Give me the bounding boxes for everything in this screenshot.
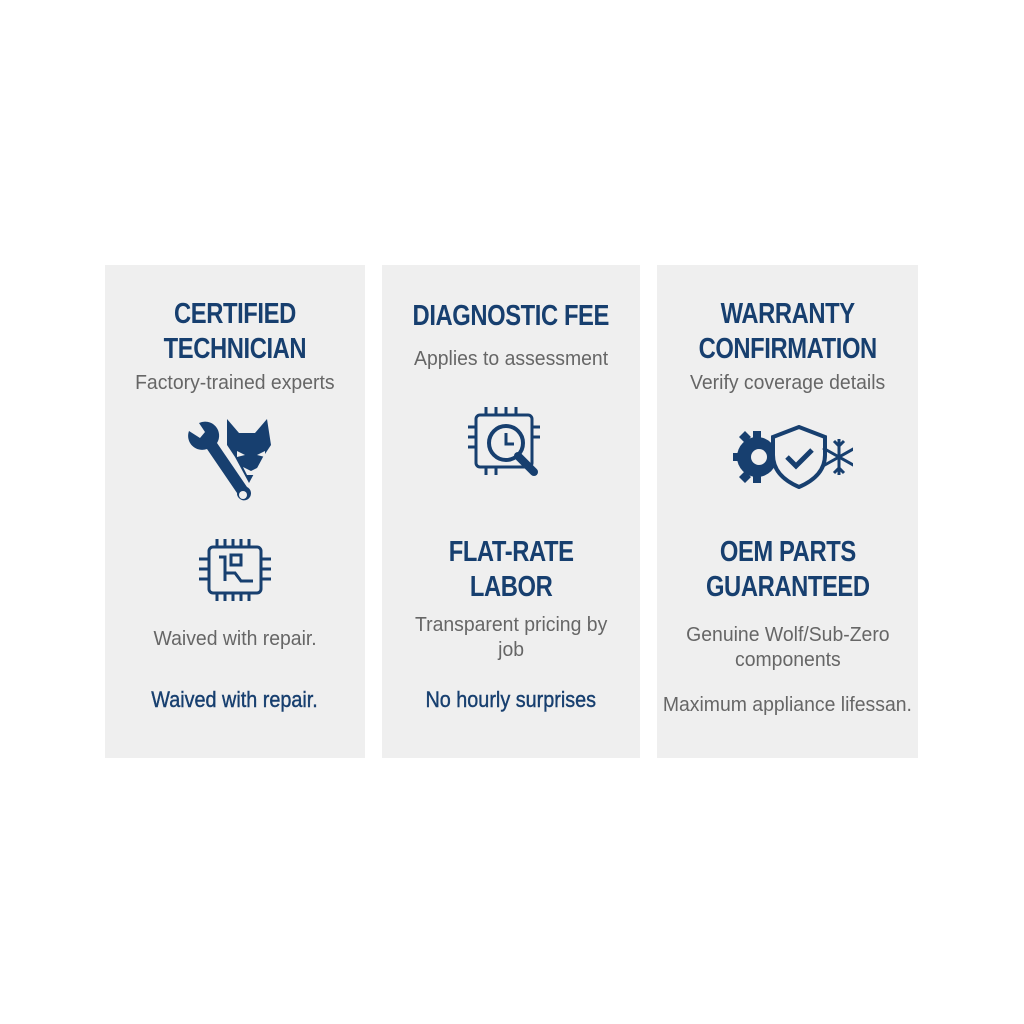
heading: flat-rate labor: LABOR bbox=[470, 571, 552, 603]
icon: circuit chip bbox=[199, 539, 271, 601]
text: transparent pricing: Transparent pricing by bbox=[415, 614, 607, 636]
text: genuine components: components bbox=[735, 649, 840, 671]
heading: TECHNICIAN bbox=[164, 333, 306, 365]
panel: diagnostic fee bbox=[382, 265, 640, 758]
text: waived gray: Waived with repair. bbox=[153, 628, 317, 650]
heading bbox=[698, 298, 877, 365]
heading: oem parts bbox=[706, 536, 870, 603]
text: transparent pricing bbox=[415, 614, 608, 661]
icon: wrench and wolf bbox=[188, 419, 271, 500]
heading bbox=[164, 298, 306, 365]
heading: CONFIRMATION bbox=[698, 333, 877, 365]
subtitle: Verify coverage details bbox=[690, 372, 885, 394]
panel: certified technician bbox=[105, 265, 365, 758]
heading: oem parts: OEM PARTS bbox=[720, 536, 855, 568]
text: genuine components bbox=[686, 624, 889, 671]
subtitle: Applies to assessment bbox=[414, 348, 608, 370]
icon: chip with clock magnifier bbox=[468, 407, 540, 476]
panel: warranty confirmation bbox=[657, 265, 918, 758]
heading: flat-rate labor: FLAT-RATE bbox=[449, 536, 573, 568]
heading: CERTIFIED bbox=[174, 298, 296, 330]
subtitle: Factory-trained experts bbox=[135, 372, 335, 394]
text: genuine components: Genuine Wolf/Sub-Zero bbox=[686, 624, 889, 646]
heading: DIAGNOSTIC FEE bbox=[413, 300, 609, 332]
icon: gear shield snowflake bbox=[733, 425, 853, 489]
heading: oem parts: GUARANTEED bbox=[706, 571, 869, 603]
text: waived blue: Waived with repair. bbox=[152, 687, 318, 712]
heading: WARRANTY bbox=[720, 298, 855, 330]
text: transparent pricing: job bbox=[498, 639, 524, 661]
text: lifespan: Maximum appliance lifessan. bbox=[663, 694, 912, 716]
heading: flat-rate labor bbox=[449, 536, 574, 603]
text: no hourly surprises: No hourly surprises bbox=[426, 687, 596, 712]
